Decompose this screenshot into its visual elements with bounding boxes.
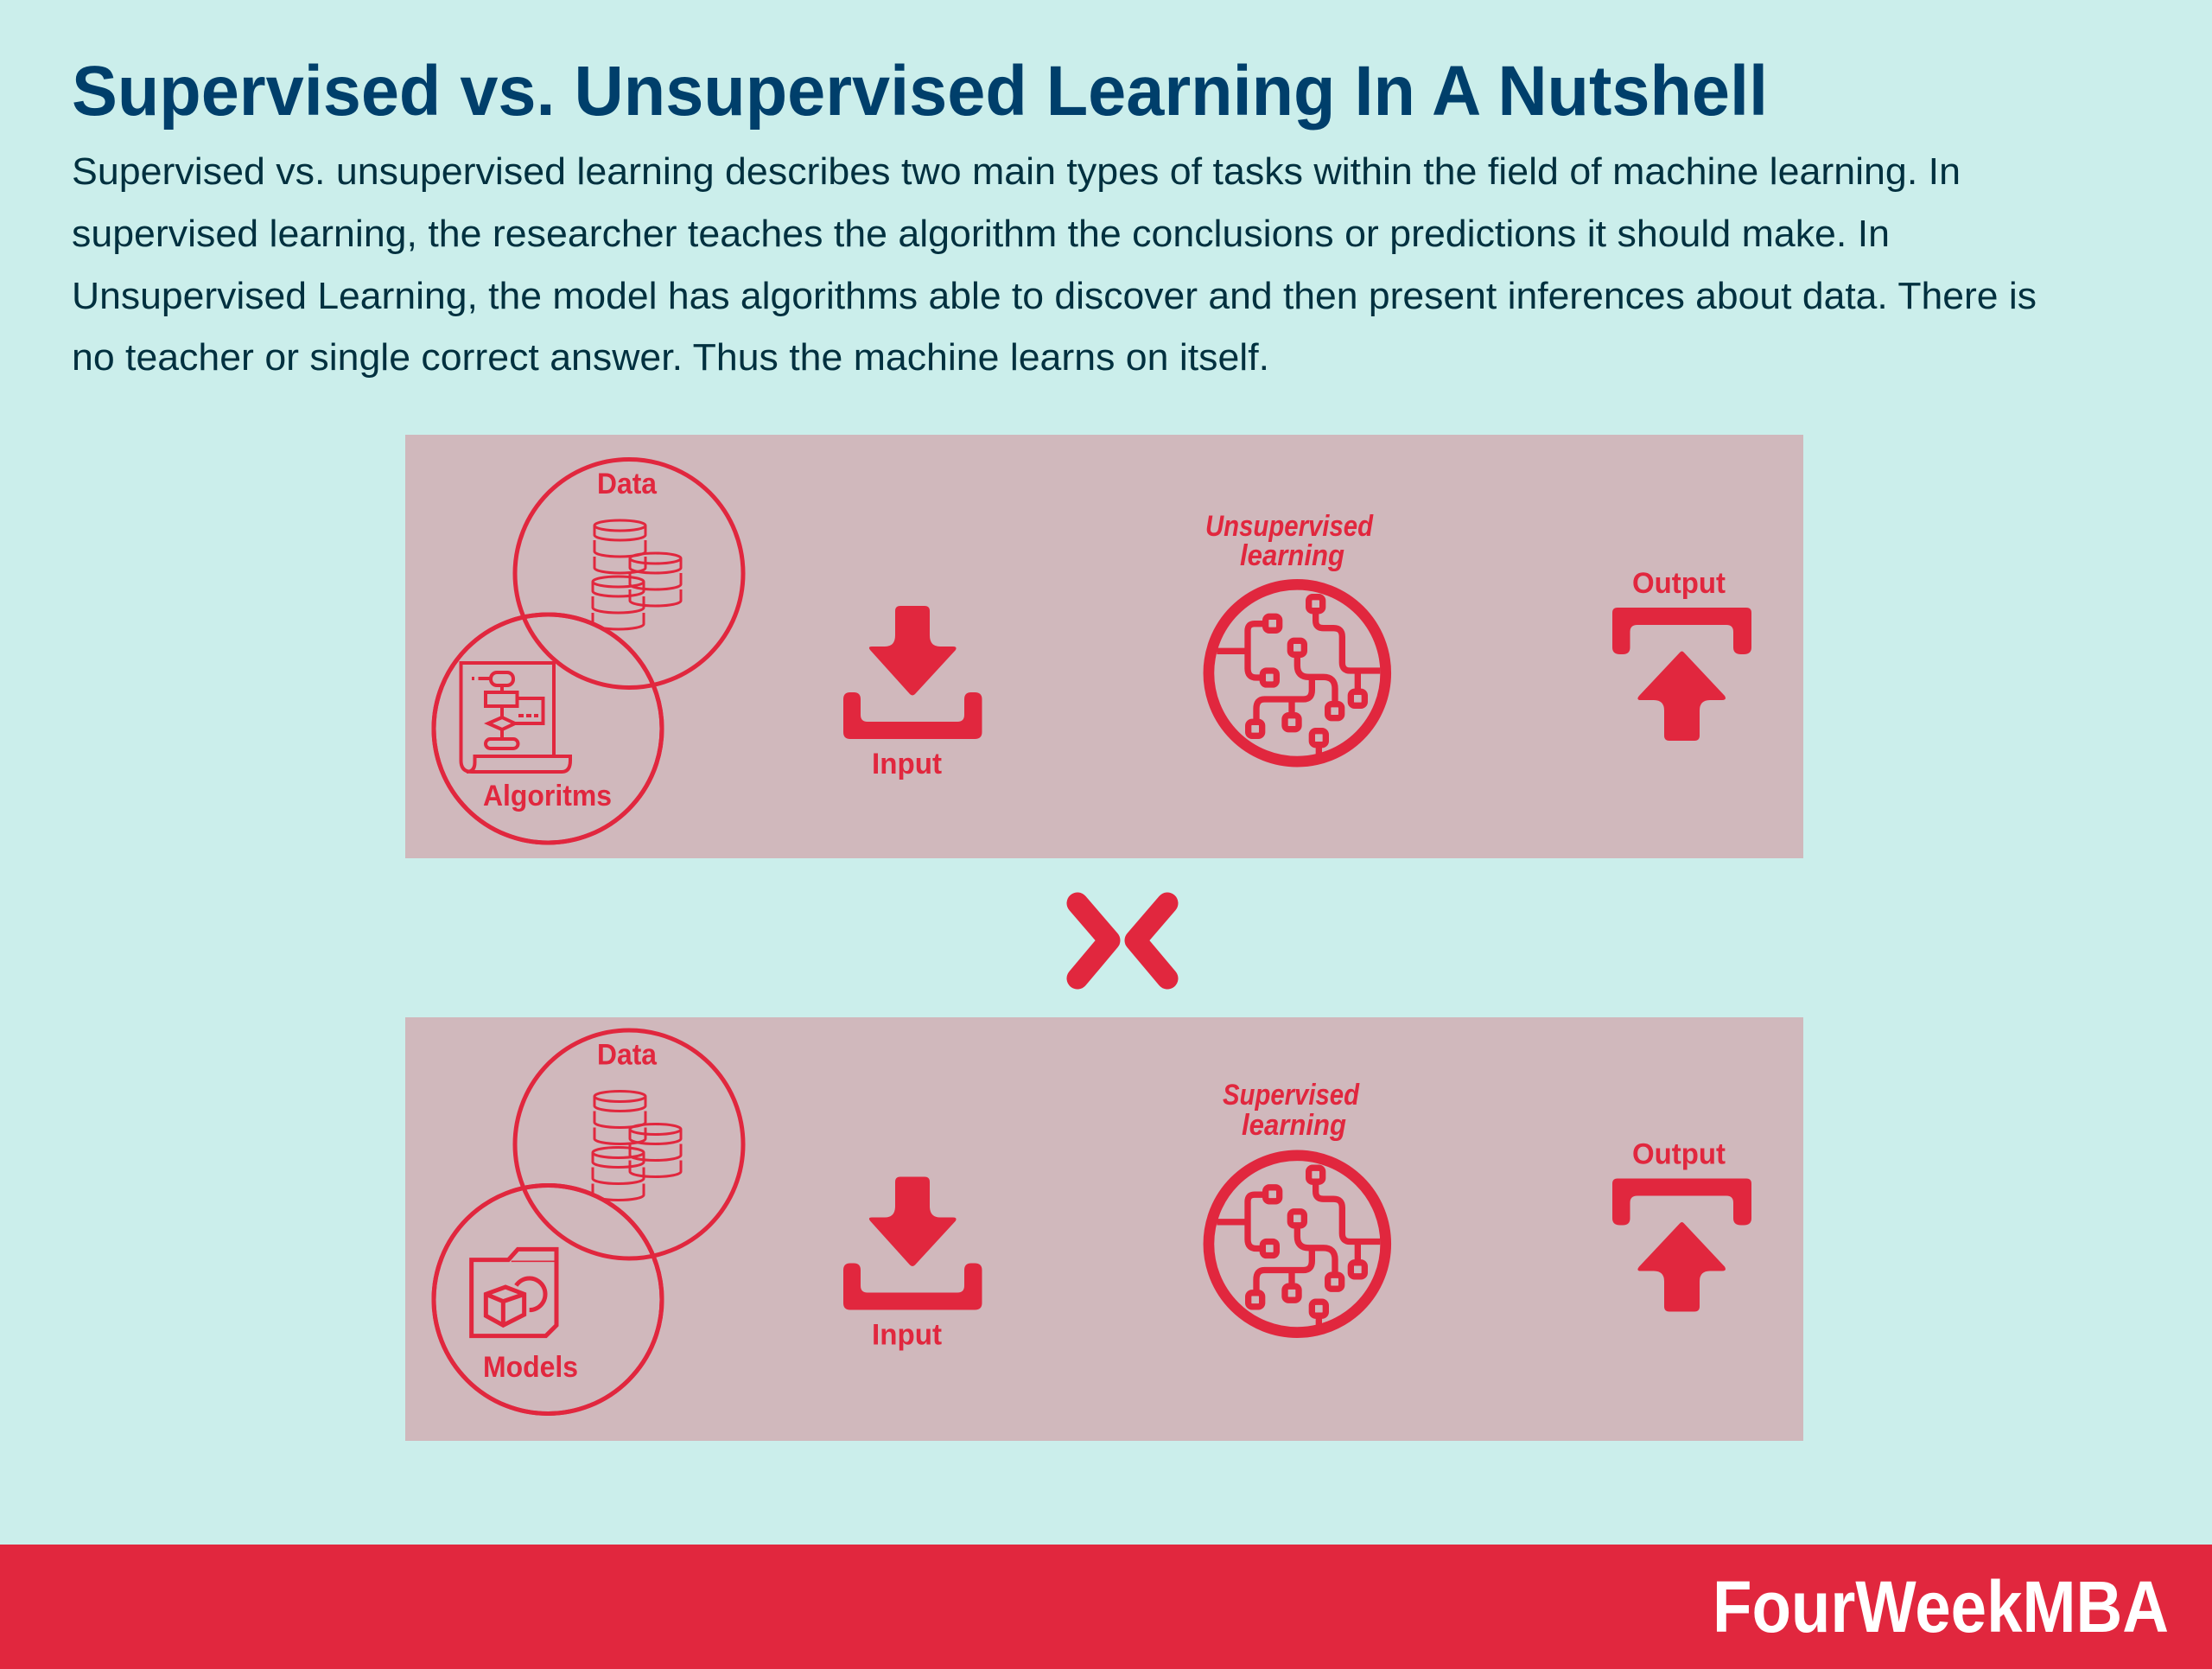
icon: algorithm flowchart document — [461, 663, 570, 772]
panel: supervised learning — [405, 1017, 1803, 1441]
label: input: Input — [872, 748, 942, 780]
algorithms circle outline — [434, 615, 662, 843]
data circle — [515, 1030, 743, 1258]
icon: data stacks — [593, 1091, 681, 1200]
footer brand: FourWeekMBA — [1713, 1566, 2169, 1647]
label: input: Input — [872, 1319, 942, 1352]
heading: supervised learning: learning — [1242, 1109, 1346, 1142]
icon: neural circuit — [1209, 584, 1386, 761]
intro text block: no teacher or single correct answer. Thus the machine learns on itself. — [72, 336, 1269, 379]
panel: unsupervised learning — [405, 435, 1803, 858]
label: data: Data — [597, 468, 658, 500]
label: output: Output — [1632, 567, 1726, 600]
icon: output arrow — [1612, 1179, 1751, 1312]
label: models: Models — [483, 1351, 578, 1384]
icon: output arrow — [1612, 608, 1751, 741]
heading: supervised learning — [1223, 1079, 1360, 1142]
label: algoritms: Algoritms — [483, 780, 612, 812]
intro text block: Supervised vs. unsupervised learning describes two main types of tasks within the field of machine learning. In — [72, 150, 1961, 193]
label: data: Data — [597, 1039, 658, 1072]
heading: unsupervised learning: Unsupervised — [1205, 510, 1374, 543]
intro text block: Unsupervised Learning, the model has algorithms able to discover and then present inferences about data. There is — [72, 275, 2037, 317]
intro text block: supervised learning, the researcher teaches the algorithm the conclusions or predictions it should make. In — [72, 213, 1890, 255]
algorithms circle — [434, 615, 662, 843]
heading: unsupervised learning: learning — [1240, 539, 1344, 572]
title: Supervised vs. Unsupervised Learning In A Nutshell — [72, 52, 1768, 131]
icon: input arrow — [843, 606, 982, 739]
icon: data stacks — [593, 520, 681, 629]
data circle — [515, 460, 743, 688]
models circle — [434, 1186, 662, 1414]
heading: supervised learning: Supervised — [1223, 1079, 1360, 1112]
icon: versus chevrons — [1077, 903, 1167, 978]
icon: neural circuit — [1209, 1156, 1386, 1333]
icon: model folder — [472, 1249, 556, 1336]
footer band — [0, 1545, 2212, 1669]
models circle outline — [434, 1186, 662, 1414]
icon: input arrow — [843, 1177, 982, 1310]
heading: unsupervised learning — [1205, 510, 1374, 572]
label: output: Output — [1632, 1137, 1726, 1170]
intro text block — [72, 150, 2037, 379]
